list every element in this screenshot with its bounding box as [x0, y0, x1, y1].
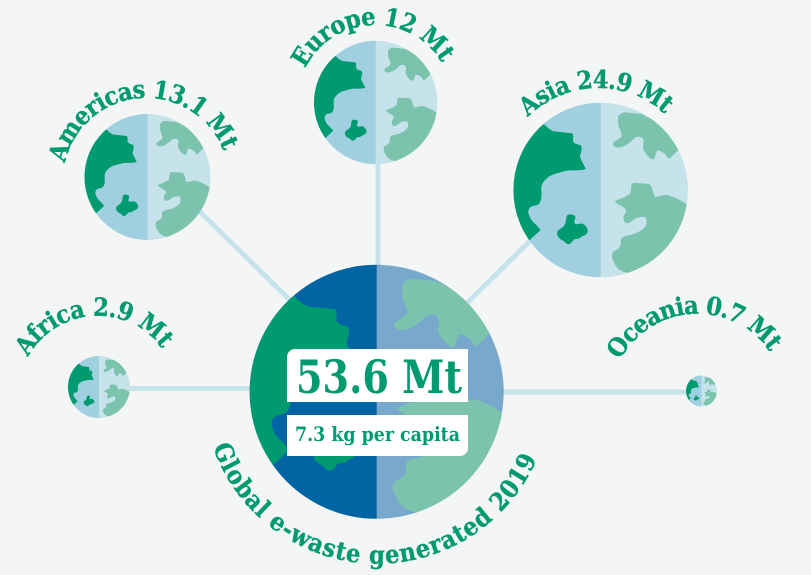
globe: Asia — [513, 102, 688, 278]
label: Oceania: Oceania 0.7 Mt — [608, 296, 782, 356]
globe: Americas — [84, 114, 210, 240]
total value box: 53.6 Mt — [296, 350, 462, 404]
label: Asia: Asia 24.9 Mt — [521, 69, 673, 118]
globe: Oceania — [686, 376, 717, 406]
label: Americas: Americas 13.1 Mt — [49, 80, 238, 164]
label: Europe: Europe 12 Mt — [290, 8, 454, 68]
globe: Africa — [68, 356, 130, 418]
connector lines — [120, 155, 695, 392]
per capita box — [287, 415, 468, 456]
globe: world total — [250, 264, 504, 519]
per capita box: 7.3 kg per capita — [295, 422, 460, 446]
globe: Europe — [314, 40, 438, 164]
label: Africa: Africa 2.9 Mt — [16, 297, 173, 358]
caption: Global e-waste generated 2019: Global e-waste generated 2019 — [215, 443, 534, 570]
